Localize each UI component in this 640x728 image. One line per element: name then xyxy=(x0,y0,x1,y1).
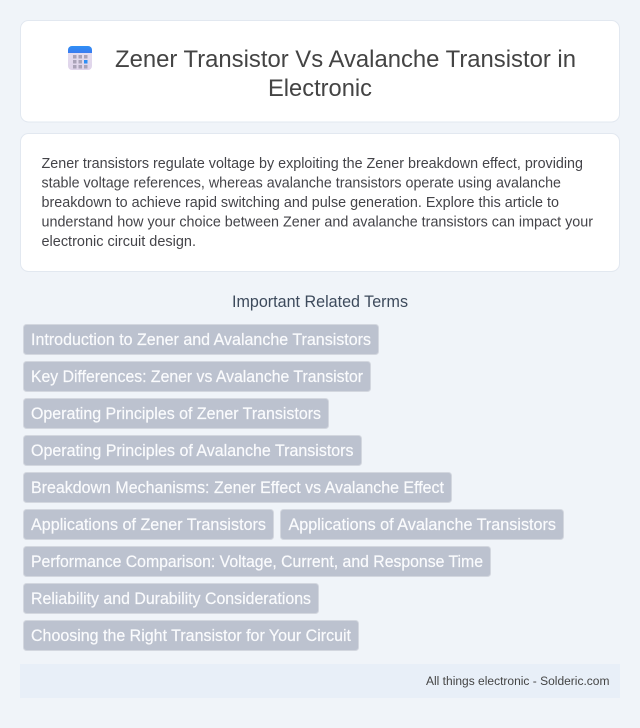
tag: zener operating principles: Operating Principles of Zener Transistors xyxy=(31,405,321,423)
footer bar xyxy=(20,664,620,698)
icon: calendar xyxy=(68,46,92,70)
panel: title card xyxy=(20,20,620,122)
tag: breakdown mechanisms: Breakdown Mechanisms: Zener Effect vs Avalanche Effect xyxy=(31,479,444,497)
title: Zener Transistor Vs Avalanche Transistor in xyxy=(115,46,576,73)
tag: reliability: Reliability and Durability Considerations xyxy=(31,590,311,608)
text block: introduction paragraph: understand how your choice between Zener and avalanche transistors can impact your xyxy=(42,214,593,230)
heading: important related terms: Important Related Terms xyxy=(232,293,408,311)
tag: introduction: Introduction to Zener and Avalanche Transistors xyxy=(31,331,371,349)
tag list xyxy=(24,324,564,650)
footer text: All things electronic - Solderic.com xyxy=(426,674,610,688)
title xyxy=(115,46,576,102)
tag: introduction xyxy=(24,324,378,354)
tag: avalanche operating principles xyxy=(24,436,362,466)
tag: key differences xyxy=(24,362,370,392)
tag: performance comparison xyxy=(24,546,490,576)
tag: key differences: Key Differences: Zener vs Avalanche Transistor xyxy=(31,368,363,386)
text block: introduction paragraph: Zener transistors regulate voltage by exploiting the Zener breakdown effect, providing xyxy=(42,156,583,172)
tag: avalanche applications: Applications of Avalanche Transistors xyxy=(288,516,556,534)
title: Electronic xyxy=(268,75,372,102)
tag: avalanche applications xyxy=(280,510,564,540)
tag: performance comparison: Performance Comparison: Voltage, Current, and Response Time xyxy=(31,553,483,571)
tag: zener applications: Applications of Zener Transistors xyxy=(31,516,266,534)
text block: introduction paragraph: stable voltage references, whereas avalanche transistors operate using avalanche xyxy=(42,176,561,192)
tag: choosing transistor: Choosing the Right Transistor for Your Circuit xyxy=(31,627,351,645)
tag: reliability xyxy=(24,584,318,614)
tag: zener applications xyxy=(24,510,274,540)
tag: breakdown mechanisms xyxy=(24,472,452,502)
tag: choosing transistor xyxy=(24,620,358,650)
panel: introduction xyxy=(20,134,620,272)
text block: introduction paragraph: breakdown to achieve rapid switching and pulse generation. Explore this article to xyxy=(42,195,559,211)
text block: introduction paragraph: electronic circuit design. xyxy=(42,234,196,250)
tag: zener operating principles xyxy=(24,398,328,428)
text block: introduction paragraph xyxy=(42,156,593,250)
tag: avalanche operating principles: Operating Principles of Avalanche Transistors xyxy=(31,442,354,460)
